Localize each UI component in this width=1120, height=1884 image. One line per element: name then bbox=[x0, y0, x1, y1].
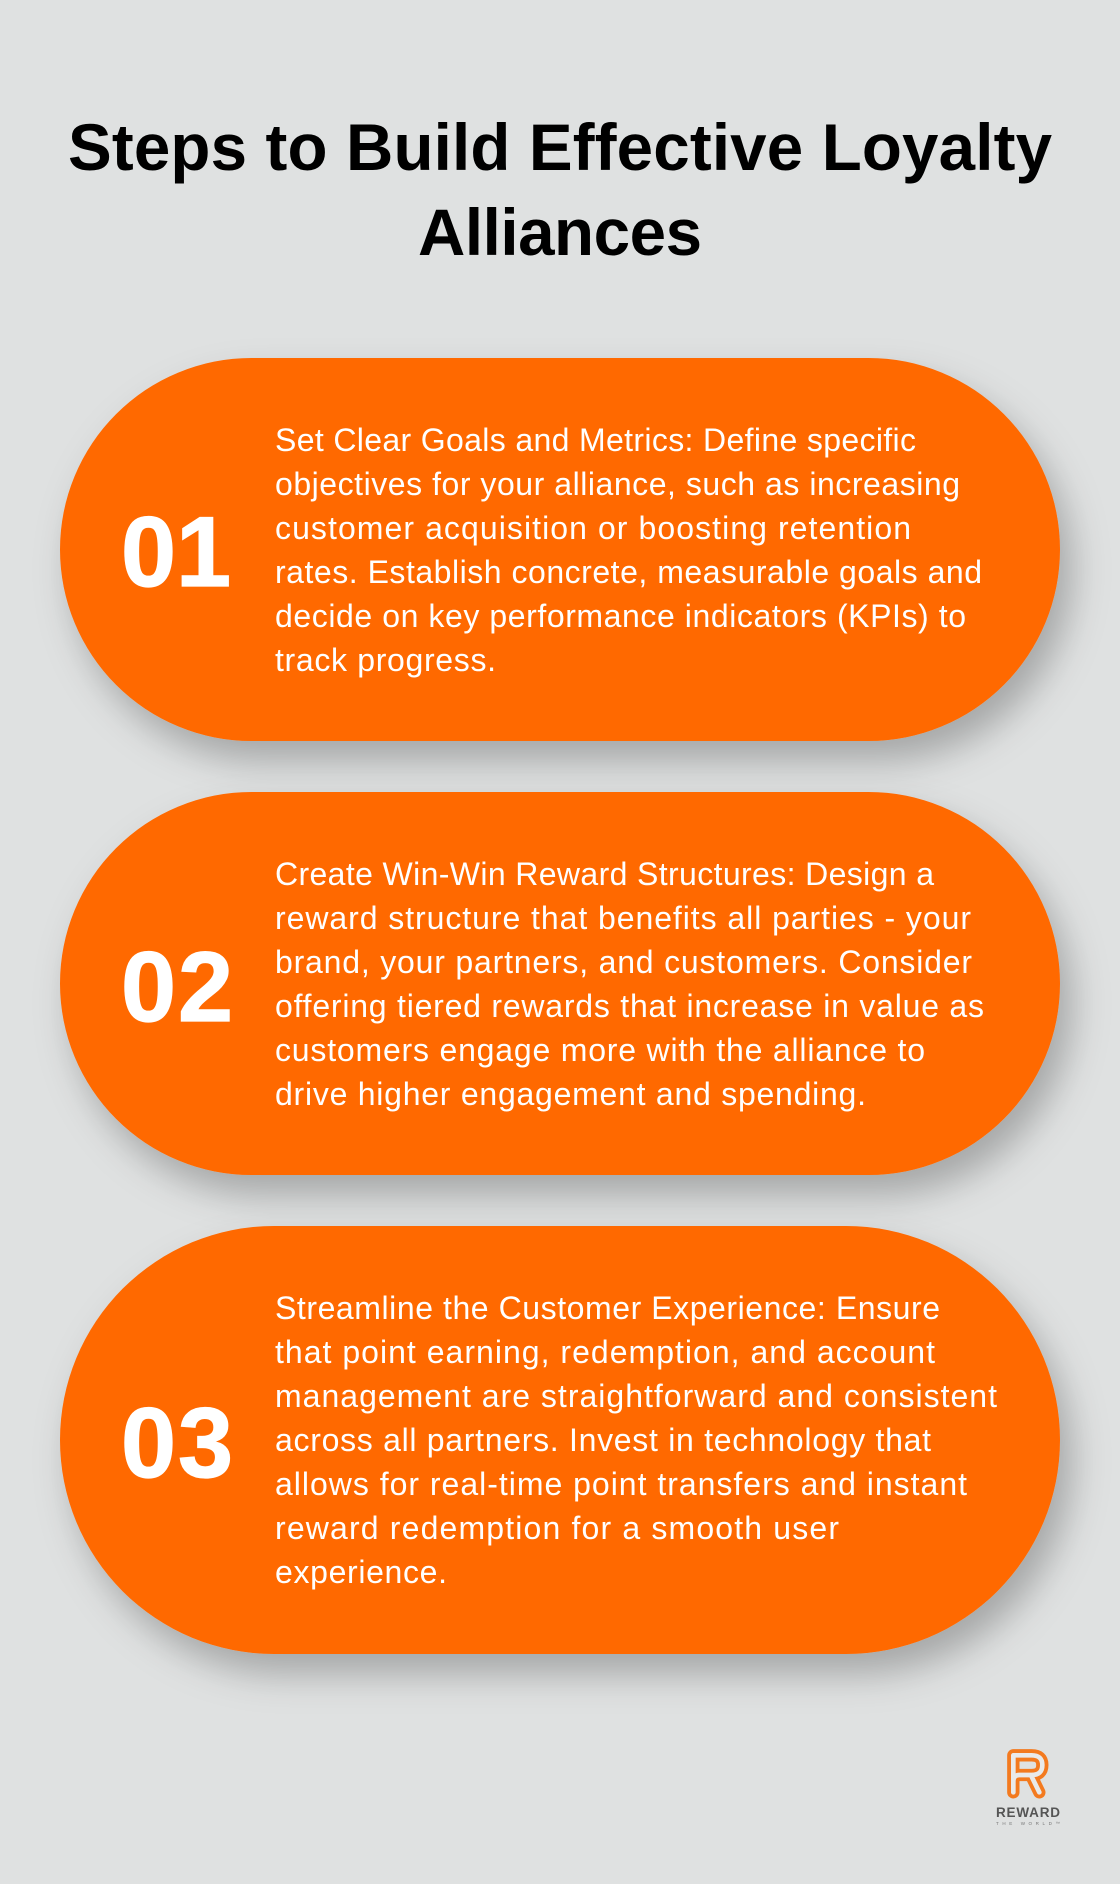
step 03 text: across all partners. Invest in technology that bbox=[275, 1422, 931, 1458]
step 02 text: brand, your partners, and customers. Consider bbox=[275, 944, 972, 980]
title: Steps to Build Effective Loyalty bbox=[68, 111, 1053, 184]
step 03 text: allows for real-time point transfers and instant bbox=[275, 1466, 967, 1502]
number 03: 03 bbox=[121, 1387, 233, 1498]
step 03 text: reward redemption for a smooth user bbox=[275, 1510, 839, 1546]
title: Alliances bbox=[418, 196, 702, 269]
number 01: 01 bbox=[121, 496, 231, 607]
step 03 text: management are straightforward and consistent bbox=[275, 1378, 997, 1414]
logo tagline: THE WORLD™ bbox=[996, 1821, 1060, 1826]
step 01 text: customer acquisition or boosting retention bbox=[275, 510, 911, 546]
pill background 03 bbox=[60, 1226, 1060, 1654]
title bbox=[68, 111, 1053, 269]
step 02 text: offering tiered rewards that increase in value as bbox=[275, 988, 984, 1024]
logo: Reward the World bbox=[996, 1755, 1060, 1826]
step 01 text: track progress. bbox=[275, 642, 496, 678]
step 03 text: experience. bbox=[275, 1554, 447, 1590]
step 02 text: customers engage more with the alliance to bbox=[275, 1032, 925, 1068]
panel: step 02 bbox=[60, 792, 1060, 1175]
icon: R mark bbox=[1013, 1755, 1042, 1792]
pill background 01 bbox=[60, 358, 1060, 741]
number 02: 02 bbox=[121, 931, 233, 1042]
step 03 text: that point earning, redemption, and account bbox=[275, 1334, 935, 1370]
panel: step 01 bbox=[60, 358, 1060, 741]
step 01 text: rates. Establish concrete, measurable goals and bbox=[275, 554, 982, 590]
step 01 text: Set Clear Goals and Metrics: Define specific bbox=[275, 422, 916, 458]
step 01 text: decide on key performance indicators (KPIs) to bbox=[275, 598, 966, 634]
step 03 text bbox=[275, 1290, 997, 1590]
step 01 text bbox=[275, 422, 982, 678]
panel: step 03 bbox=[60, 1226, 1060, 1654]
logo wordmark: REWARD bbox=[996, 1805, 1060, 1820]
step 02 text: drive higher engagement and spending. bbox=[275, 1076, 866, 1112]
step 02 text bbox=[275, 856, 984, 1112]
step 02 text: Create Win-Win Reward Structures: Design a bbox=[275, 856, 934, 892]
step 03 text: Streamline the Customer Experience: Ensure bbox=[275, 1290, 940, 1326]
step 02 text: reward structure that benefits all parties - your bbox=[275, 900, 971, 936]
step 01 text: objectives for your alliance, such as increasing bbox=[275, 466, 960, 502]
pill background 02 bbox=[60, 792, 1060, 1175]
